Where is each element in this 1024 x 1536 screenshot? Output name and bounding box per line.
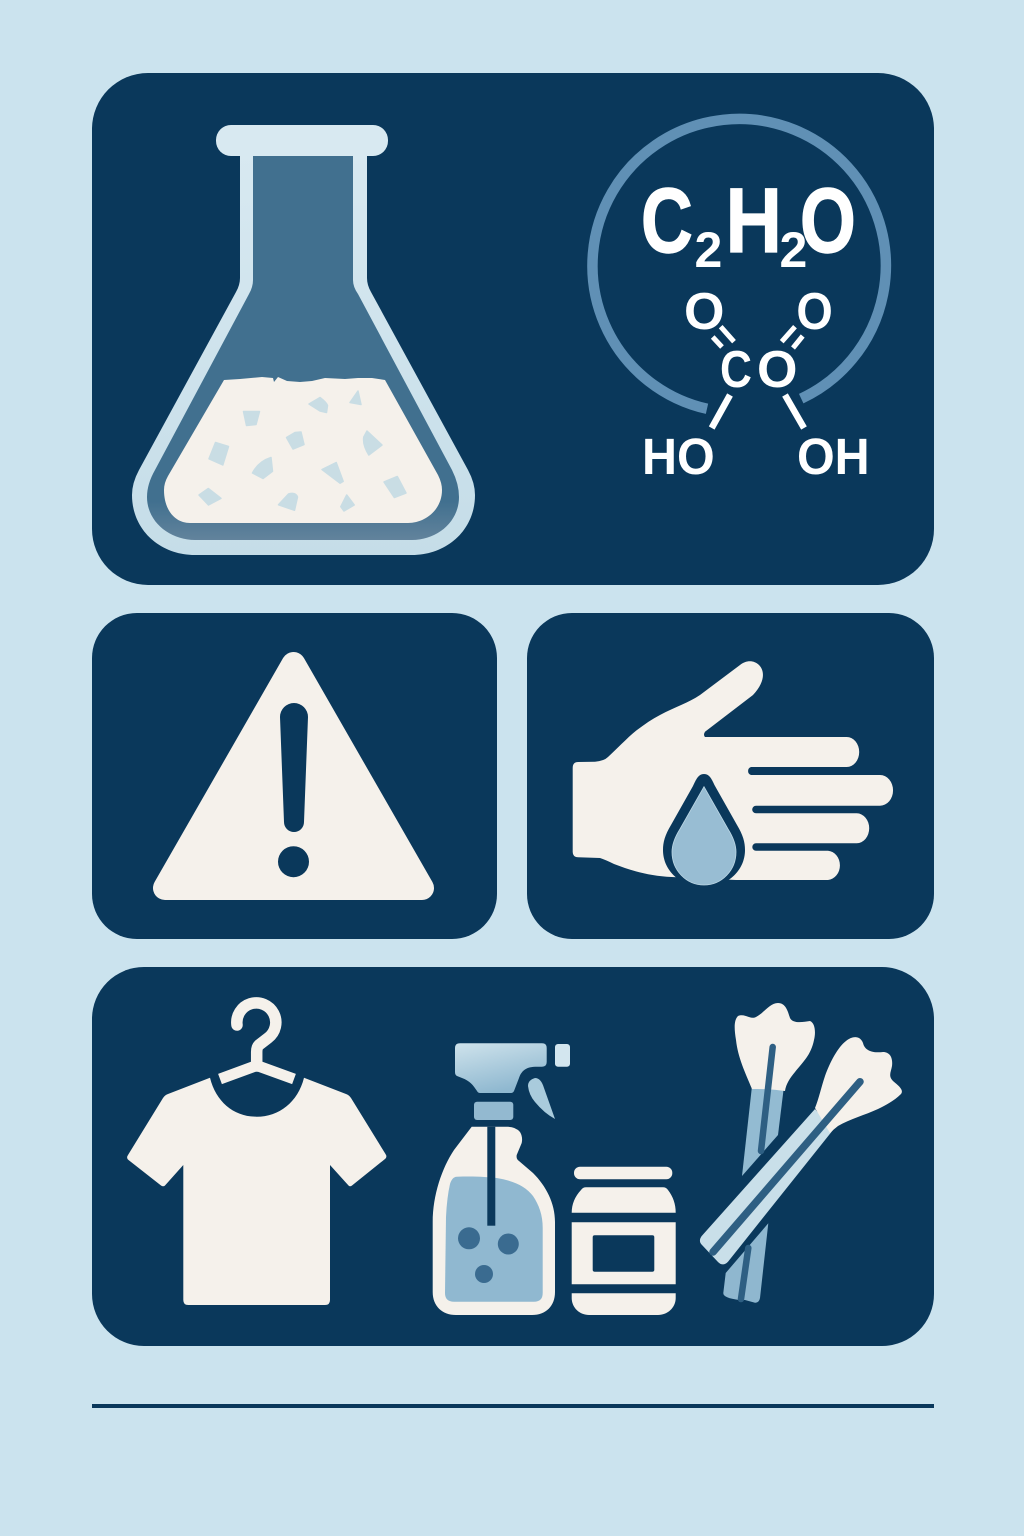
front swab shaft (700, 1109, 833, 1264)
back swab upper shaft (742, 1086, 784, 1176)
droplet outline (663, 774, 745, 887)
trigger (528, 1078, 555, 1119)
molecular structure: HO (642, 428, 715, 485)
formula C2H2O: H (726, 170, 782, 272)
sprayer head (455, 1043, 547, 1093)
white powder (164, 377, 442, 523)
icon: jar (572, 1167, 676, 1315)
molecular structure: OH (797, 428, 870, 485)
flask lip (216, 125, 388, 156)
formula C2H2O: O (800, 169, 856, 272)
bubbles (458, 1227, 519, 1283)
collar (474, 1102, 513, 1120)
panel: household uses (92, 967, 934, 1346)
icon: warning triangle (165, 664, 422, 888)
panel: warning (92, 613, 497, 939)
molecular structure: O (796, 283, 833, 341)
hanger arms (220, 1066, 294, 1079)
bottle body (433, 1127, 555, 1315)
back swab head (735, 1003, 815, 1091)
chemical formula diagram (592, 119, 886, 485)
icon: hand with droplet (573, 661, 893, 887)
icon: spray bottle (433, 1043, 570, 1315)
front swab stripe (713, 1082, 860, 1252)
hanger hook (237, 1003, 276, 1066)
formula C2H2O (641, 169, 856, 278)
molecular structure: O (757, 341, 797, 399)
front swab head (815, 1037, 902, 1133)
formula C2H2O: C (641, 169, 693, 272)
ring (592, 119, 886, 409)
icon: flask with powder (132, 125, 475, 555)
panel: skin contact (527, 613, 934, 939)
panel: substance and chemistry (92, 73, 934, 585)
droplet (672, 787, 736, 885)
powder crystals (199, 391, 406, 511)
formula C2H2O: 2 (780, 222, 807, 278)
dip tube (487, 1127, 495, 1226)
hand (573, 661, 893, 880)
molecular structure: C (720, 341, 752, 399)
exclamation mark (278, 703, 309, 877)
nozzle tip (555, 1044, 570, 1067)
t-shirt (127, 1078, 386, 1305)
liquid (445, 1176, 543, 1302)
icon: t-shirt on hanger (127, 1003, 386, 1305)
back swab stripes (741, 1047, 773, 1299)
icon: cotton swabs (700, 1003, 902, 1303)
footer rule (92, 1404, 934, 1408)
formula C2H2O: 2 (694, 222, 722, 278)
molecular structure: O (684, 283, 724, 341)
flask glass wall (132, 150, 475, 555)
back swab lower segment (723, 1223, 768, 1303)
flask interior (147, 156, 459, 540)
molecular structure (642, 283, 870, 485)
